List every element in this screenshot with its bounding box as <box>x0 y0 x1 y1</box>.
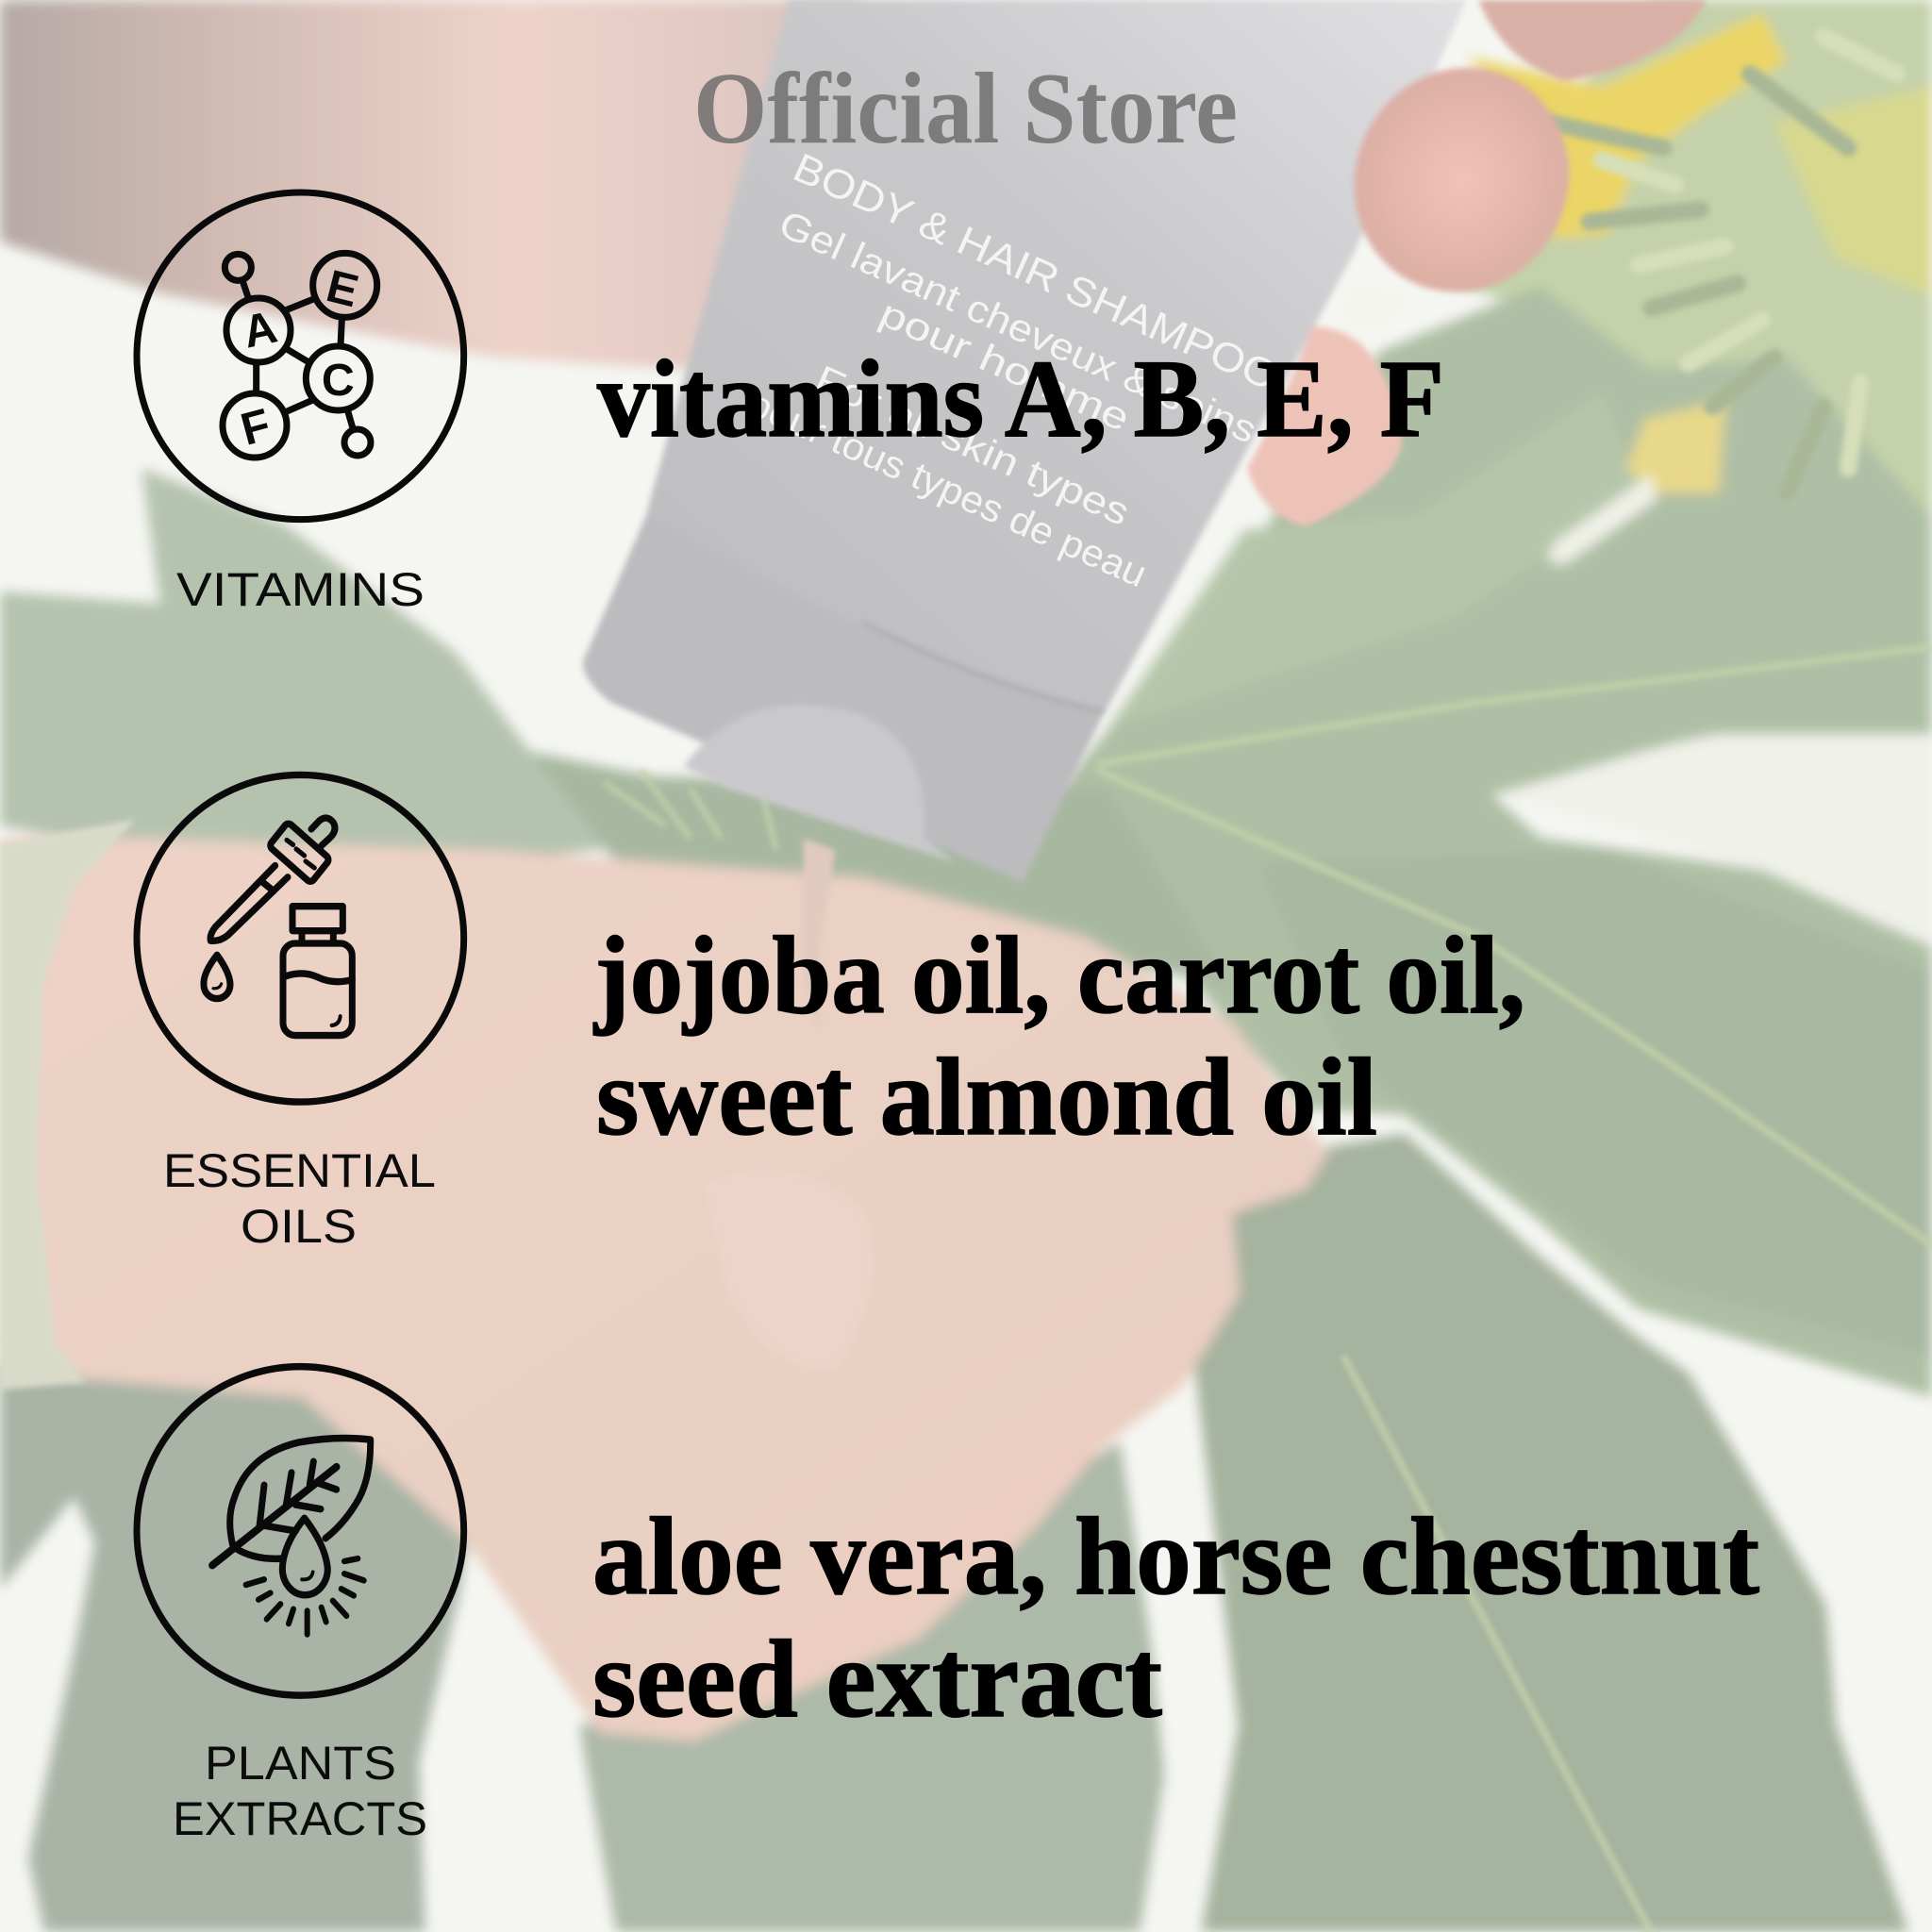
tube label text: BODY & HAIR SHAMPOO <box>787 145 1285 400</box>
leaf: lower centre <box>579 1441 1164 1932</box>
tube label text: pour tous types de peau <box>741 380 1154 595</box>
thumb <box>1317 32 1606 327</box>
lower finger <box>1247 326 1402 526</box>
text: plant extracts list <box>592 1494 1759 1740</box>
cap recess <box>684 705 955 862</box>
tube label text: pour homme <box>874 291 1137 440</box>
flower foliage <box>1454 0 1932 579</box>
icon: vitamins: F <box>236 399 275 456</box>
tube cap <box>583 506 1109 882</box>
icon: vitamins <box>137 192 464 520</box>
tube label text <box>692 145 1287 612</box>
leaf: upper shadow near tube <box>1109 394 1639 727</box>
text: oils list <box>593 913 1525 1158</box>
text: oils list: sweet almond oil <box>596 1035 1377 1158</box>
text: vitamins list: vitamins A, B, E, F <box>597 337 1444 460</box>
bracelet <box>0 820 136 1390</box>
text: plant extracts list: aloe vera, horse chestnut <box>592 1494 1759 1618</box>
tube seam <box>862 623 1106 712</box>
icon: vitamins: C <box>322 355 355 406</box>
oil on hand <box>702 1169 874 1369</box>
label: essential oils <box>163 1144 436 1253</box>
leaf midribs <box>1096 647 1932 1932</box>
top arm <box>0 0 862 370</box>
tube body <box>647 0 1466 712</box>
icon: plants extracts <box>137 1367 464 1695</box>
icon: essential oils <box>137 774 464 1102</box>
text: oils list: jojoba oil, carrot oil, <box>593 913 1525 1037</box>
icon: vitamins: A <box>239 302 281 358</box>
flower foliage spikes <box>1553 37 1897 492</box>
label: plants extracts: EXTRACTS <box>173 1792 427 1845</box>
hand <box>0 838 1328 1741</box>
label: vitamins: VITAMINS <box>176 563 425 616</box>
top finger <box>1478 0 1707 81</box>
yellow flower petals <box>1466 12 1787 239</box>
leaf: upper right <box>1059 286 1932 1397</box>
tube label text: Gel lavant cheveux & soins <box>773 202 1263 452</box>
leaf: centre behind tube <box>530 752 1232 986</box>
text: plant extracts list: seed extract <box>592 1617 1162 1740</box>
leaf veins at hub <box>604 770 776 850</box>
label: essential oils: ESSENTIAL <box>163 1144 436 1197</box>
small white gap beside thumb <box>1337 277 1417 333</box>
leaf: lower left <box>0 1361 467 1932</box>
label: plants extracts: PLANTS <box>205 1737 396 1790</box>
label: plants extracts <box>173 1737 427 1845</box>
leaf: left <box>0 468 690 862</box>
leaf: right shade <box>1257 850 1932 1356</box>
title: Official Store: Official Store <box>693 53 1238 165</box>
oil drip <box>804 838 836 1035</box>
leaf: lower right <box>1115 1134 1908 1932</box>
tube label text: For all skin types <box>809 357 1136 534</box>
icon: vitamins: E <box>322 260 363 317</box>
white gap right <box>1492 734 1932 946</box>
label: essential oils: OILS <box>241 1200 357 1253</box>
